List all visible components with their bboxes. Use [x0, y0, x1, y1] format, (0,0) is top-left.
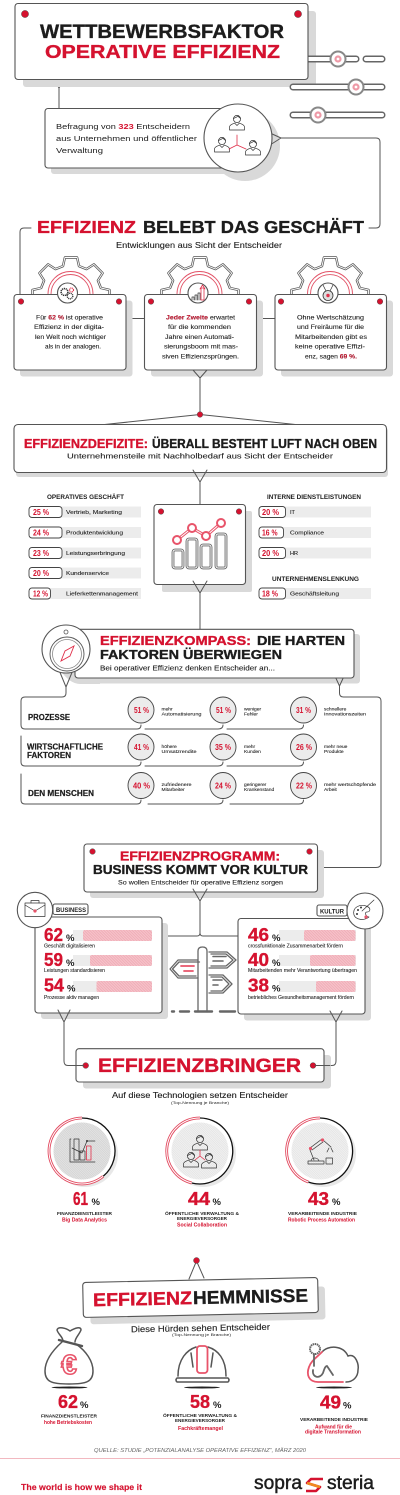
row: Den Menschen: zufriedenere [162, 782, 192, 788]
connector [193, 470, 207, 504]
programm heading [93, 850, 308, 877]
row: Prozesse: 51 % [216, 705, 231, 715]
stat: Social Collaboration 44 %: % [212, 1197, 222, 1208]
list: Interne Dienstleistungen: 20 % [262, 508, 279, 517]
subheading: Technologien: (Top-Nennung je Branche) [171, 1101, 229, 1105]
stat: hohe Betriebskosten 62 %: hohe Betriebskosten [44, 1420, 92, 1426]
panel: center chart [154, 504, 252, 592]
row: Prozesse: weniger [244, 706, 261, 712]
icon: cloud and hook [308, 1344, 358, 1388]
panel: Effizienzdefizite [14, 424, 388, 477]
card 2 text: sierungsboom mit mas- [164, 344, 238, 350]
row: Den Menschen [21, 772, 376, 804]
stat: Digitale Transformation 49 %: 49 [320, 1392, 341, 1412]
card 1 text [34, 314, 107, 350]
list: Interne Dienstleistungen: Compliance [290, 530, 325, 536]
bars: business: 62 [44, 925, 63, 945]
panel: survey [45, 104, 380, 228]
panel: Effizienzhemmnisse: EFFIZIENZ [93, 1287, 192, 1310]
list: Operatives Geschäft: Lieferkettenmanagement [66, 592, 138, 598]
connector: title to survey [52, 76, 66, 108]
subheading: Hürden: Diese Hürden sehen Entscheider [131, 1322, 270, 1334]
footer logo [254, 1473, 374, 1494]
row: Prozesse: PROZESSE [28, 713, 71, 722]
row: Wirtschaftliche Faktoren: 41 % [134, 742, 149, 752]
row: Wirtschaftliche Faktoren: FAKTOREN [27, 751, 71, 760]
card 1 text: Effizienz in der digita- [34, 324, 104, 331]
row: Prozesse: 31 % [296, 705, 311, 715]
defizite heading [24, 436, 377, 451]
title text [40, 21, 284, 62]
stat: Digitale Transformation 49 %: Aufwand für die [315, 1424, 352, 1430]
list: Interne Dienstleistungen: Geschäftsleitung [290, 592, 339, 598]
gears behind cards [32, 258, 368, 304]
row: Prozesse: mehr [162, 706, 173, 712]
connector [162, 889, 238, 936]
row: Prozesse: Fehler [244, 712, 258, 718]
card 1 text: als in der analogen. [45, 344, 101, 350]
list: Interne Dienstleistungen: 16 % [262, 528, 278, 538]
tag: Kultur: KULTUR [320, 908, 344, 916]
stat: Fachkräftemangel 58 % [163, 1346, 238, 1432]
panel: title [15, 4, 382, 122]
bars: business: 59 [44, 950, 63, 970]
stat: Robotic Process Automation 43 %: 43 [308, 1189, 329, 1209]
list: Interne Dienstleistungen: 18 % [262, 590, 278, 598]
stat: Fachkräftemangel 58 %: 58 [190, 1392, 210, 1412]
icon: rising bars [188, 283, 208, 303]
stat: Robotic Process Automation 43 %: % [332, 1197, 341, 1208]
card 1 text: Für 62 % ist operative [36, 314, 103, 322]
heading: Effizienz belebt das Geschäft: EFFIZIENZ [37, 217, 136, 237]
bars: kultur: 38 [248, 976, 269, 996]
row: Den Menschen: Mitarbeiter [162, 787, 185, 793]
card 2 [144, 283, 263, 376]
row: Wirtschaftliche Faktoren: 35 % [215, 742, 231, 752]
connector with node [100, 370, 300, 425]
bars: kultur: % [272, 984, 281, 995]
defizite subheading: Unternehmensteile mit Nachholbedarf aus Sicht der Entscheider [67, 452, 334, 460]
card 2 text: Jeder Zweite erwartet [166, 314, 235, 322]
stat: Digitale Transformation 49 % [300, 1344, 368, 1436]
bars: kultur: betriebliches Gesundheitsmanagement fördern [248, 995, 354, 1001]
row: Prozesse: 51 % [134, 705, 149, 715]
kompass heading: EFFIZIENZKOMPASS: [100, 633, 251, 648]
card 3 text [295, 314, 368, 360]
sliders decoration [293, 52, 382, 122]
bars: business: Prozesse aktiv managen [44, 995, 99, 1001]
kompass subheading: Bei operativer Effizienz denken Entscheider an... [100, 666, 275, 672]
panel: Effizienzkompass [42, 625, 381, 868]
heading: Effizienz belebt das Geschäft [37, 217, 364, 237]
stat: Big Data 61 %: 61 [73, 1189, 88, 1209]
icon: big data [70, 1139, 95, 1162]
icon: palette [347, 893, 383, 929]
subheading: Technologien: Auf diese Technologien setzen Entscheider [112, 1091, 288, 1100]
bars: kultur: % [272, 958, 281, 969]
row: Den Menschen: DEN MENSCHEN [28, 789, 94, 798]
stat: Social Collaboration 44 %: ENERGIEVERSORGER [177, 1216, 228, 1221]
list: Interne Dienstleistungen: INTERNE DIENSTLEISTUNGEN [267, 494, 361, 501]
list: Operatives Geschäft: OPERATIVES GESCHÄFT [47, 493, 124, 501]
card 3 text: enz, sagen 69 %. [305, 354, 357, 360]
bars: kultur: % [272, 933, 281, 944]
row: Den Menschen: geringerer [244, 782, 267, 788]
row: Wirtschaftliche Faktoren: 26 % [296, 742, 312, 752]
icon: medal [318, 283, 338, 303]
icon: bars and trend [173, 519, 226, 568]
bars: business: % [66, 958, 75, 969]
bars: kultur: crossfunktionale Zusammenarbeit fördern [248, 944, 343, 950]
card 1 [14, 283, 132, 376]
bars: business: % [66, 933, 75, 944]
card 3 text: Ohne Wertschätzung [297, 314, 364, 322]
card 3 text: Mitarbeitenden gibt es [295, 334, 368, 341]
list: Operatives Geschäft: Kundenservice [66, 571, 110, 577]
heading: Effizienz belebt das Geschäft: BELEBT DAS GESCHÄFT [143, 217, 364, 237]
panel: Effizienzbringer: EFFIZIENZBRINGER [98, 1056, 301, 1077]
bars: business: Geschäft digitalisieren [44, 944, 95, 950]
bars: business: Leistungen standardisieren [44, 968, 105, 974]
stat: Big Data 61 %: % [92, 1197, 100, 1208]
stat: Fachkräftemangel 58 %: ÖFFENTLICHE VERWALTUNG & [163, 1412, 238, 1418]
subheading: Entwicklungen: Entwicklungen aus Sicht der Entscheider [116, 241, 282, 250]
card 2 text [162, 314, 239, 360]
stat: Fachkräftemangel 58 %: ENERGIEVERSORGER [175, 1418, 226, 1423]
footer logo: steria [327, 1473, 374, 1494]
survey text: aus Unternehmen und öffentlicher [56, 134, 198, 143]
footer logo: sopra [254, 1473, 302, 1494]
list: Interne Dienstleistungen: 20 % [262, 549, 279, 558]
source note: QUELLE: STUDIE „POTENZIALANALYSE OPERATIVE EFFIZIENZ“, MÄRZ 2020 [94, 1447, 307, 1454]
stat: hohe Betriebskosten 62 %: % [80, 1400, 89, 1411]
card 3 text: und Freiräume für die [297, 324, 364, 331]
footer slogan: The world is how we shape it [21, 1482, 142, 1492]
bars: business: 54 [44, 976, 64, 996]
icon: cogs [58, 283, 78, 303]
panel: Effizienzprogramm [84, 844, 324, 898]
signpost illustration [170, 947, 236, 1012]
stat: Big Data 61 %: FINANZDIENSTLEISTER [57, 1211, 113, 1216]
card 3 text: keine operative Effizi- [295, 344, 365, 350]
stat: Fachkräftemangel 58 %: % [213, 1400, 222, 1411]
list: Operatives Geschäft [29, 493, 141, 599]
row: Wirtschaftliche Faktoren: Kunden [244, 749, 261, 755]
title text: OPERATIVE EFFIZIENZ [45, 41, 280, 62]
icon: people [184, 1135, 216, 1168]
tag: Business [53, 904, 88, 914]
row: Wirtschaftliche Faktoren: mehr [244, 744, 256, 750]
stat: Digitale Transformation 49 %: digitale Transformation [305, 1430, 361, 1436]
row: Wirtschaftliche Faktoren: Produkte [324, 749, 344, 755]
bars: kultur: 40 [248, 950, 269, 970]
row: Prozesse: schnellere [324, 706, 347, 712]
card 3 [275, 283, 393, 376]
row: Wirtschaftliche Faktoren: Umsatzrendite [162, 749, 197, 755]
stat: Social Collaboration 44 %: 44 [188, 1189, 210, 1209]
icon: money bag: € [61, 1349, 77, 1380]
row: Den Menschen: 22 % [296, 780, 312, 790]
list: Operatives Geschäft: 24 % [33, 528, 49, 538]
tag: Kultur [317, 905, 347, 916]
panel: Business [17, 892, 168, 1019]
row: Prozesse: Innovationszeiten [324, 712, 366, 718]
stat: hohe Betriebskosten 62 % [41, 1328, 98, 1426]
icon: compass [42, 625, 90, 687]
bars: kultur [248, 925, 357, 1001]
list: Interne Dienstleistungen: IT [290, 510, 295, 516]
connector [193, 581, 207, 630]
bars: kultur: Mitarbeitenden mehr Verantwortung übertragen [248, 968, 357, 974]
stat: Social Collaboration 44 %: ÖFFENTLICHE VERWALTUNG & [165, 1210, 240, 1216]
stat: Social Collaboration 44 %: Social Collaboration [177, 1222, 227, 1228]
stat: Digitale Transformation 49 %: % [343, 1400, 352, 1412]
stat: hohe Betriebskosten 62 %: FINANZDIENSTLEISTER [41, 1414, 98, 1418]
tag: Business: BUSINESS [56, 907, 86, 914]
list: Interne Dienstleistungen: HR [290, 551, 298, 557]
row: Wirtschaftliche Faktoren [21, 734, 348, 766]
title text: WETTBEWERBSFAKTOR [40, 21, 284, 43]
list: Operatives Geschäft: Produktentwicklung [66, 530, 123, 536]
hanger with node [189, 1258, 204, 1279]
survey text: Befragung von 323 Entscheidern [56, 122, 190, 131]
panel: Effizienzhemmnisse [83, 1277, 325, 1324]
programm heading: EFFIZIENZPROGRAMM: [120, 850, 280, 864]
list: Interne Dienstleistungen [259, 494, 371, 599]
row: Prozesse [21, 687, 366, 729]
stat: Robotic Process Automation 43 %: Robotic Process Automation [288, 1218, 355, 1224]
row: Den Menschen: mehr wertschöpfende [324, 782, 376, 788]
panel: Effizienzhemmnisse: HEMMNISSE [193, 1285, 308, 1308]
survey text: Verwaltung [56, 146, 103, 155]
card 2 text: für die kommenden [168, 324, 231, 331]
list: Operatives Geschäft: Vertrieb, Marketing [66, 510, 122, 516]
list: Operatives Geschäft: 20 % [33, 569, 49, 578]
stat: Fachkräftemangel 58 %: Fachkräftemangel [178, 1426, 224, 1432]
stat: Digitale Transformation 49 %: VERARBEITENDE INDUSTRIE [300, 1417, 368, 1422]
card 2 text: Jahre einen Automati- [165, 334, 234, 341]
kompass heading: FAKTOREN ÜBERWIEGEN [100, 647, 282, 662]
stat: Social Collaboration 44 % [165, 1118, 240, 1228]
list: Operatives Geschäft: Leistungserbringung [66, 551, 125, 557]
list: Operatives Geschäft: 23 % [33, 549, 49, 558]
bars: business: % [67, 984, 76, 995]
subheading: Technologien [112, 1091, 288, 1105]
list: Operatives Geschäft: 25 % [33, 508, 49, 517]
bars: kultur: 46 [248, 925, 269, 945]
row: Prozesse: Automatisierung [162, 712, 202, 718]
row: Den Menschen: 40 % [133, 780, 150, 790]
list: Operatives Geschäft: 12 % [33, 590, 48, 598]
row: Wirtschaftliche Faktoren: höhere [162, 744, 177, 750]
programm heading: BUSINESS KOMMT VOR KULTUR [93, 863, 308, 877]
row: Den Menschen: Arbeit [324, 787, 337, 793]
kompass heading [100, 633, 345, 662]
card 2 text: siven Effizienzsprüngen. [162, 354, 239, 360]
stat: Robotic Process Automation 43 % [287, 1118, 357, 1224]
stat: hohe Betriebskosten 62 %: 62 [58, 1392, 78, 1412]
card 1 text: len Welt noch wichtiger [35, 334, 107, 341]
subheading: Hürden: (Top-Nennung je Branche) [172, 1333, 231, 1337]
card connectors [126, 318, 275, 320]
kompass heading: DIE HARTEN [257, 633, 345, 648]
stat: Big Data 61 % [49, 1118, 118, 1224]
stat: Big Data 61 %: Big Data Analytics [62, 1218, 107, 1224]
panel: Kultur [238, 893, 383, 1020]
bars: business [44, 925, 152, 1001]
panel: Effizienzbringer [70, 1049, 331, 1088]
icon: people [214, 115, 260, 155]
connectors to Effizienzbringer [58, 1010, 342, 1066]
connector: heading to cards [20, 228, 31, 294]
list: Interne Dienstleistungen: UNTERNEHMENSLENKUNG [272, 576, 359, 583]
icon: briefcase [17, 892, 53, 928]
row: Den Menschen: Krankenstand [244, 787, 274, 793]
icon: helmet [176, 1346, 229, 1388]
row: Wirtschaftliche Faktoren: mehr neue [324, 744, 348, 750]
icon: robot arm [308, 1138, 333, 1164]
defizite heading: ÜBERALL BESTEHT LUFT NACH OBEN [152, 436, 377, 451]
defizite heading: EFFIZIENZDEFIZITE: [24, 437, 148, 451]
stat: Robotic Process Automation 43 %: VERARBEITENDE INDUSTRIE [288, 1211, 357, 1216]
programm subheading: So wollen Entscheider für operative Effizienz sorgen [118, 880, 283, 887]
row: Den Menschen: 24 % [215, 780, 231, 790]
row: Wirtschaftliche Faktoren: WIRTSCHAFTLICHE [27, 742, 104, 752]
survey text [56, 122, 198, 155]
